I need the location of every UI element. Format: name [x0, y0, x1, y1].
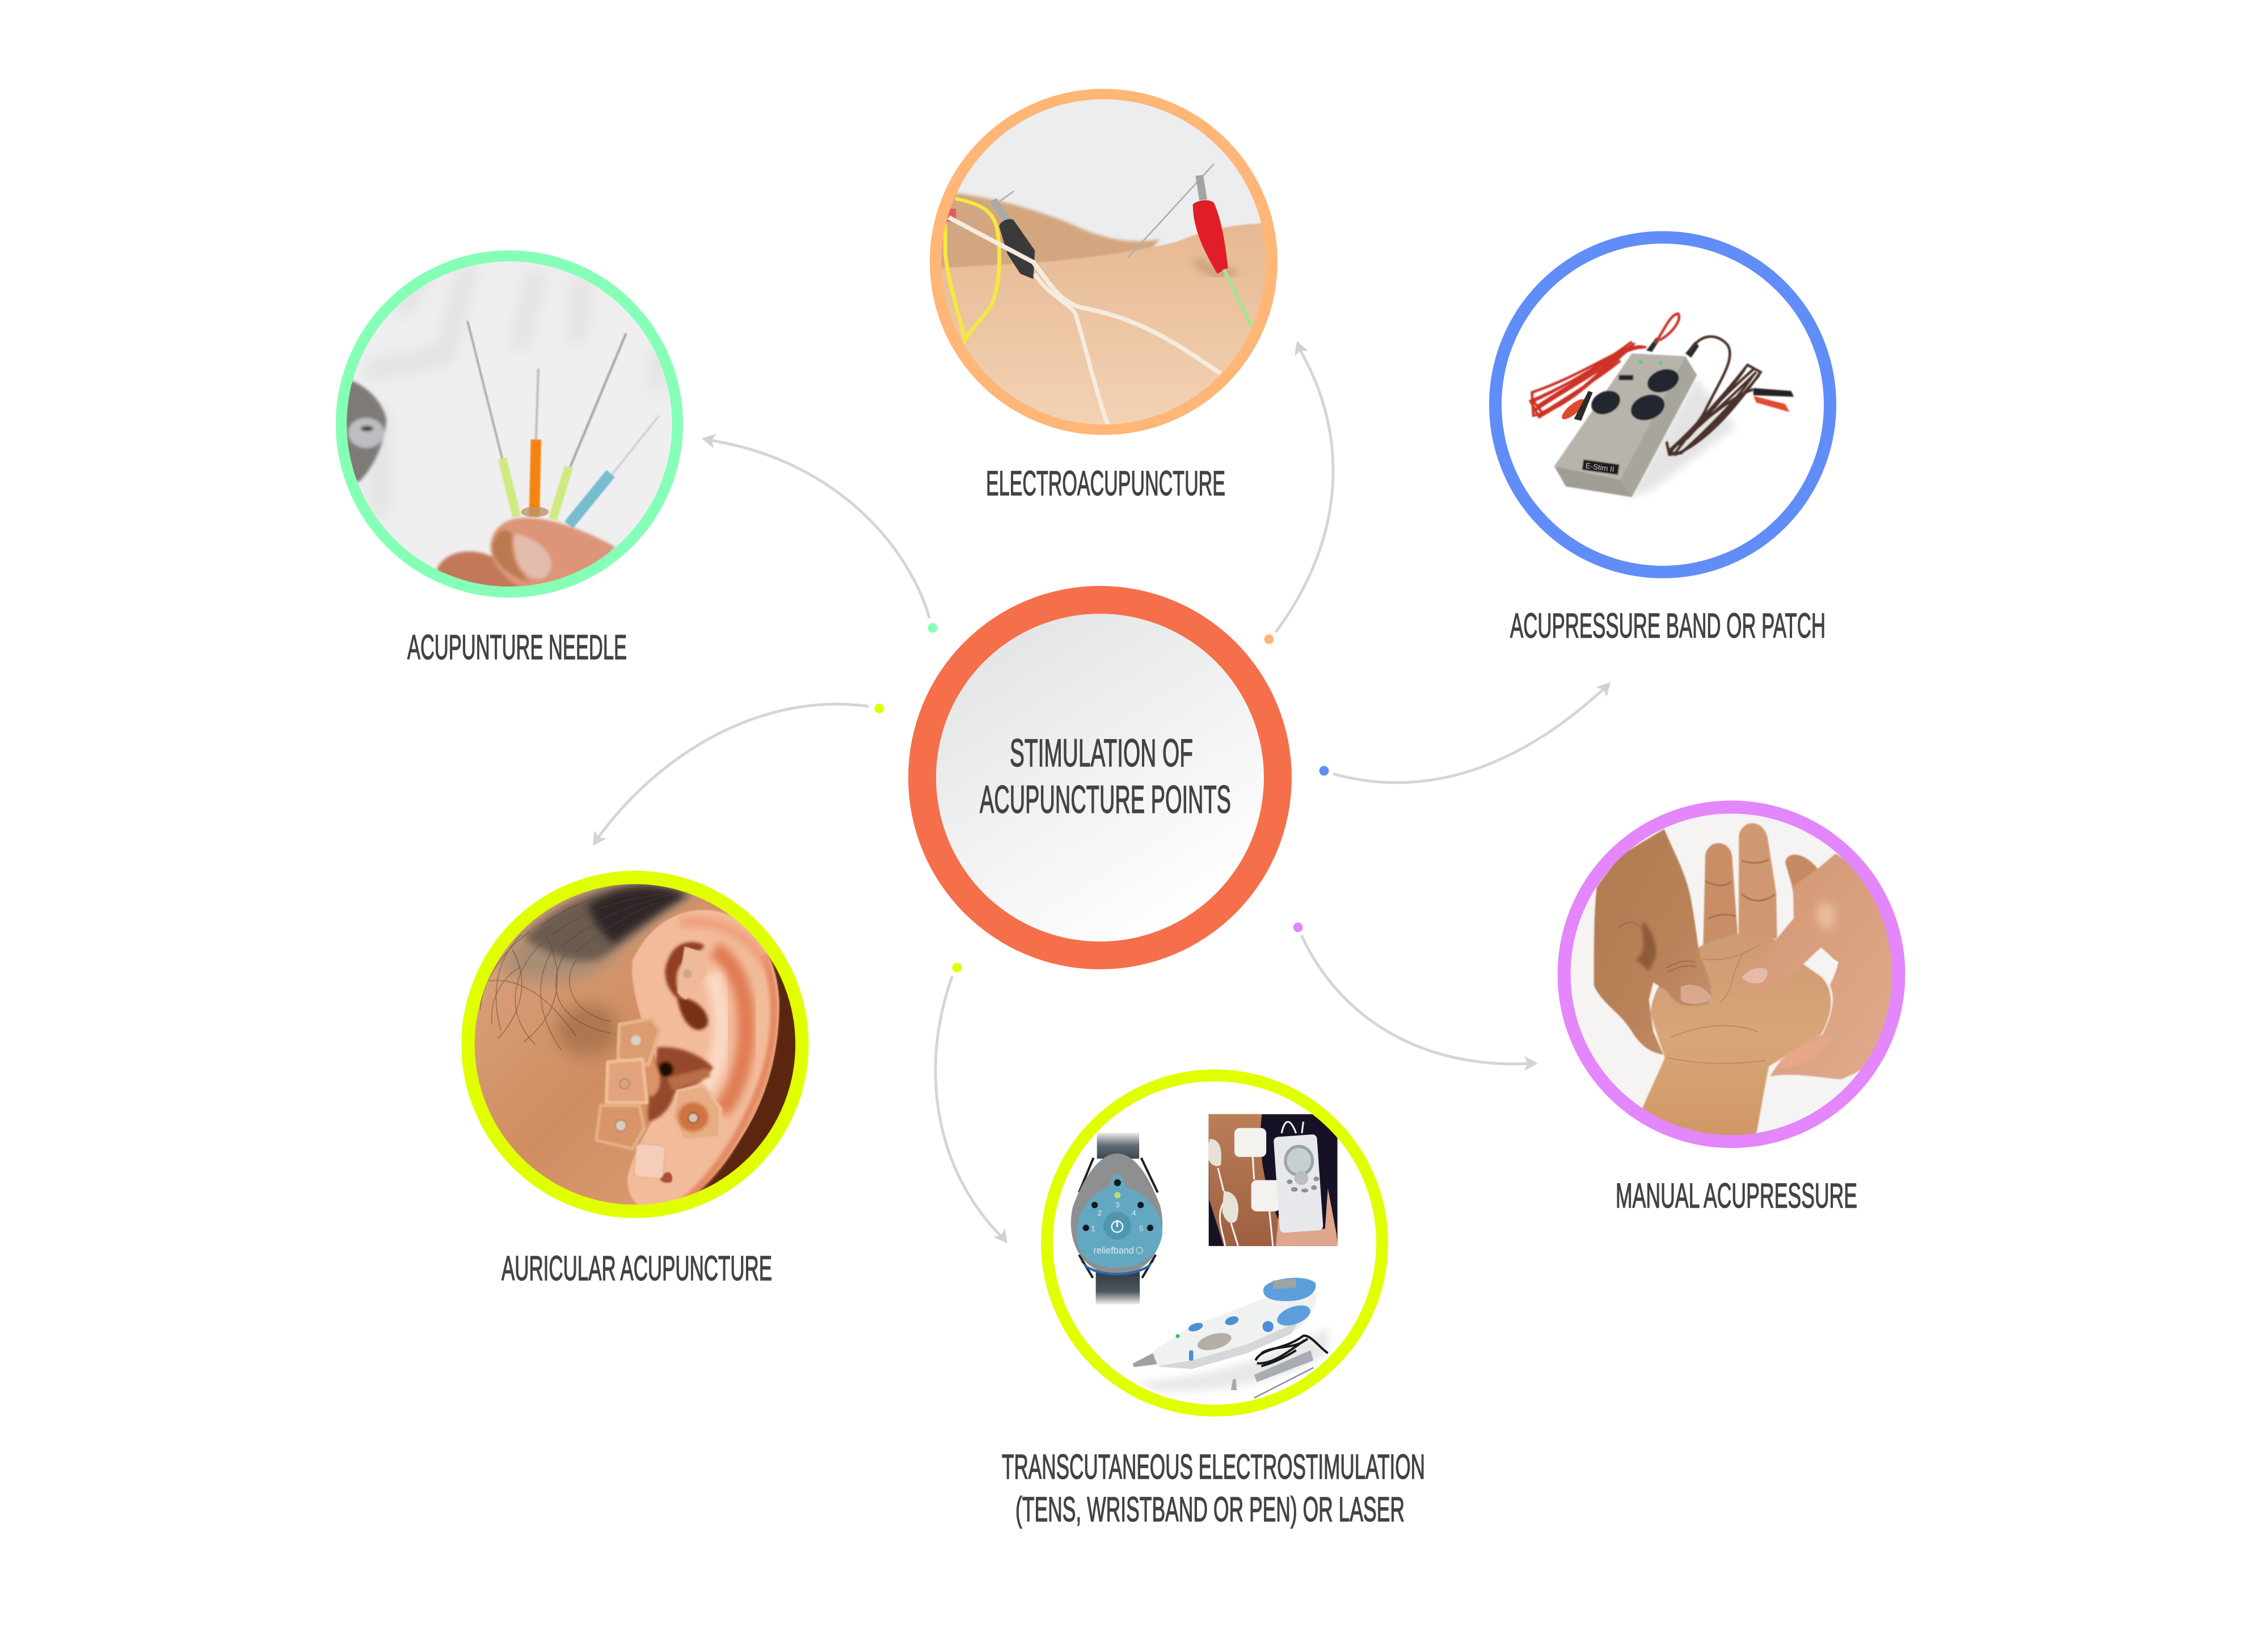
hair [498, 881, 698, 982]
arrow: centre to acupuncture needle [701, 431, 937, 633]
dark background behind ear [657, 903, 811, 1213]
patches [596, 946, 720, 1179]
forearm and palm [1642, 934, 1831, 1142]
white wires [948, 217, 1220, 374]
device body [1554, 337, 1699, 497]
label: acupunture needle: ACUPUNTURE NEEDLE [407, 628, 627, 666]
black clip [999, 219, 1035, 279]
lime ring around TENS photo [1047, 1075, 1382, 1411]
wristband numerals and brand [1091, 1201, 1143, 1256]
wristband numerals and brand: 4 [1132, 1209, 1136, 1217]
gray object at left edge [342, 379, 386, 482]
fingers [437, 517, 615, 594]
label: acupressure band or patch: ACUPRESSURE BAND OR PATCH [1510, 606, 1826, 645]
photo: hands pressing a palm [1556, 800, 1908, 1150]
panel: transcutaneous electrostimulation [1002, 1075, 1425, 1529]
panel: auricular acupuncture [460, 871, 811, 1288]
photo: stimulator device [1531, 314, 1794, 500]
wristband numerals and brand: 5 [1139, 1224, 1143, 1233]
photo: ear with patches [460, 871, 811, 1218]
acupuncture pen [1132, 1278, 1328, 1398]
label: transcutaneous electrostimulation [1002, 1447, 1425, 1529]
label: transcutaneous electrostimulation: (TENS, WRISTBAND OR PEN) OR LASER [1015, 1490, 1405, 1529]
heading: central title [980, 731, 1231, 821]
right hand [1740, 854, 1908, 1079]
dark leads [1667, 336, 1761, 455]
label: auricular acupuncture: AURICULAR ACUPUNCTURE [501, 1249, 772, 1288]
ear [627, 910, 779, 1210]
arrow: centre to manual acupressure [1293, 922, 1538, 1071]
arrow: centre to auricular acupuncture [587, 703, 884, 850]
photo: wristband, TENS unit and pen [1052, 1081, 1377, 1405]
panel: electroacupuncture [929, 88, 1278, 503]
stray hairs [480, 888, 675, 1050]
red clip [1193, 200, 1228, 274]
needles [467, 321, 659, 525]
wristband numerals and brand: 1 [1091, 1224, 1095, 1233]
photo: needles held in fingers [336, 250, 683, 597]
wristband numerals and brand: reliefband [1094, 1246, 1134, 1256]
fingers of treated hand [1703, 823, 1818, 953]
electrode needles [950, 164, 1214, 258]
red leads [1531, 314, 1679, 417]
arrow: centre to acupressure band [1320, 677, 1616, 783]
wristband device [1071, 1133, 1162, 1305]
panel: manual acupressure [1556, 800, 1908, 1215]
heading: central title: ACUPUNCTURE POINTS [980, 778, 1231, 821]
heading: central title: STIMULATION OF [1010, 731, 1193, 775]
arrow: centre to electroacupuncture [1264, 339, 1333, 644]
wristband numerals and brand: 3 [1115, 1201, 1120, 1209]
label: transcutaneous electrostimulation: TRANSCUTANEOUS ELECTROSTIMULATION [1002, 1447, 1425, 1486]
left hand [1594, 829, 1711, 1055]
arrow: centre to transcutaneous electrostimulation [935, 963, 1013, 1248]
label: manual acupressure: MANUAL ACUPRESSURE [1616, 1176, 1857, 1215]
concha and canal [646, 942, 714, 1121]
yellow wire [945, 199, 1000, 340]
TENS photo [1207, 1114, 1338, 1246]
device name tag: E-Stim II [1585, 461, 1615, 474]
earlobe fold [660, 1172, 672, 1183]
panel: central hub [908, 586, 1292, 969]
panel: acupuncture needle [336, 250, 683, 666]
photo: clips on skin [929, 88, 1278, 436]
label: electroacupuncture: ELECTROACUPUNCTURE [986, 464, 1225, 503]
panel: acupressure band or patch [1495, 237, 1830, 645]
wristband numerals and brand: 2 [1098, 1209, 1102, 1217]
